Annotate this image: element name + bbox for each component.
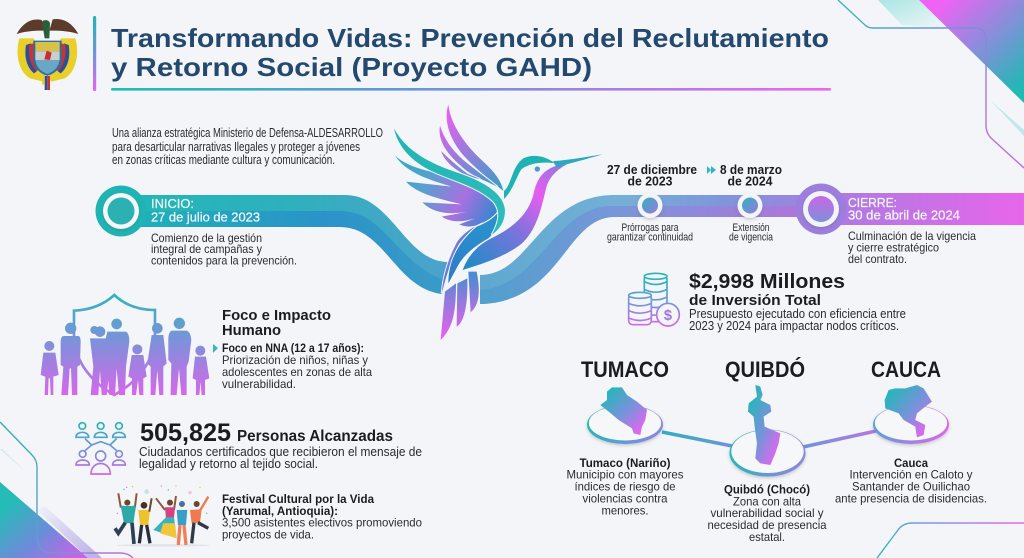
intro text: para desarticular narrativas Ilegales y proteger a jóvenes xyxy=(112,139,360,154)
intro text: en zonas críticas mediante cultura y comunicación. xyxy=(112,152,335,167)
decorative corner: bottom left xyxy=(0,422,133,558)
start date label: 27 de julio de 2023 xyxy=(151,210,260,224)
text: Quibdó: necesidad de presencia xyxy=(708,518,827,532)
milestone: 27 diciembre node xyxy=(638,193,662,218)
text: Cauca: ante presencia de disidencias. xyxy=(835,492,987,506)
decorative corner: top right xyxy=(838,0,1024,168)
festival text: Festival Cultural por la Vida xyxy=(222,492,374,506)
stat: investment: $2,998 Millones xyxy=(689,271,845,293)
text: Tumaco: menores. xyxy=(602,504,648,518)
icon: family under shield xyxy=(41,295,209,395)
stat: 505,825: Personas Alcanzadas xyxy=(237,428,393,445)
investment description: 2023 y 2024 para impactar nodos críticos. xyxy=(689,319,899,333)
map pin: Tumaco xyxy=(587,387,663,444)
closing description: y cierre estratégico xyxy=(848,240,939,254)
festival text: proyectos de vida. xyxy=(222,528,314,542)
foco text xyxy=(222,341,372,391)
milestone note: extensión: de vigencia xyxy=(729,232,774,244)
milestone date: 27 de diciembre xyxy=(607,162,697,188)
milestone date: 8 de marzo xyxy=(720,162,782,188)
milestone date: 27 de diciembre: 27 de diciembre xyxy=(607,162,697,177)
heading: foco e impacto xyxy=(222,307,331,339)
start description: integral de campañas y xyxy=(151,242,262,256)
festival text xyxy=(222,492,422,542)
hummingbird logo xyxy=(394,104,603,340)
start date label: INICIO: xyxy=(151,197,194,211)
closing date label: 30 de abril de 2024 xyxy=(848,208,960,222)
milestone date: 27 de diciembre: de 2023 xyxy=(628,174,672,188)
milestone date: 8 de marzo: 8 de marzo xyxy=(720,162,782,177)
stat description xyxy=(139,445,422,471)
title underline xyxy=(111,88,831,91)
heading: Quibdó: QUIBDÓ xyxy=(725,357,805,382)
text: Cauca: Intervención en Caloto y xyxy=(850,468,972,482)
text: Quibdó: vulnerabilidad social y xyxy=(710,506,824,520)
title xyxy=(111,23,829,82)
text: Tumaco: índices de riesgo de xyxy=(574,480,676,494)
text: Cauca xyxy=(835,456,987,506)
start date label xyxy=(151,197,260,224)
timeline ribbon: end xyxy=(480,193,1024,304)
stat: investment xyxy=(689,271,845,309)
text: Quibdó xyxy=(708,482,827,544)
stat description: legalidad y retorno al tejido social. xyxy=(139,457,318,471)
heading: Cauca: CAUCA xyxy=(871,357,941,382)
start description: contenidos para la prevención. xyxy=(151,254,297,268)
bullet marker xyxy=(213,344,218,353)
icon: people network xyxy=(76,423,125,474)
icon: Colombian coat of arms xyxy=(17,19,78,90)
icon: coins xyxy=(629,273,679,326)
foco text: adolescentes en zonas de alta xyxy=(222,365,372,379)
milestone note: prórrogas: Prórrogas para xyxy=(622,222,679,234)
heading: Tumaco: TUMACO xyxy=(581,357,669,382)
foco text: Foco en NNA (12 a 17 años): xyxy=(222,341,364,355)
closing description: Culminación de la vigencia xyxy=(848,229,976,243)
stat: 505,825: 505,825 xyxy=(140,419,231,447)
start description: Comienzo de la gestión xyxy=(151,231,262,245)
stat description: Ciudadanos certificados que recibieron el mensaje de xyxy=(139,445,422,459)
closing date label xyxy=(848,196,960,222)
text: Quibdó: Zona con alta xyxy=(733,494,801,508)
text: Tumaco: Municipio con mayores xyxy=(566,468,684,482)
text: Tumaco: violencias contra xyxy=(582,492,668,506)
title: y Retorno Social (Proyecto GAHD) xyxy=(111,52,592,82)
map pin: Quibdó xyxy=(730,385,806,476)
stat: investment: de Inversión Total xyxy=(689,292,821,309)
title: Transformando Vidas: Prevención del Reclutamiento xyxy=(111,23,829,53)
milestone date: 8 de marzo: de 2024 xyxy=(728,174,773,188)
milestone note: prórrogas: garantizar continuidad xyxy=(607,232,693,244)
milestone note: extensión xyxy=(729,222,774,244)
text: Quibdó: Quibdó (Chocó) xyxy=(724,482,810,496)
heading: foco e impacto: Humano xyxy=(222,322,281,339)
start description xyxy=(151,231,297,268)
milestone: 8 marzo node xyxy=(738,193,762,218)
text: Cauca: Cauca xyxy=(894,456,928,470)
title accent bar xyxy=(93,16,96,91)
decorative corner: bottom right xyxy=(877,523,1024,558)
text: Cauca: Santander de Ouilichao xyxy=(852,480,970,494)
illustration: people celebrating xyxy=(115,485,210,547)
milestone note: prórrogas xyxy=(607,222,693,244)
intro text xyxy=(112,125,383,167)
milestone: closing node xyxy=(796,184,846,234)
map pin: Cauca xyxy=(873,385,949,444)
festival text: 3,500 asistentes electivos promoviendo xyxy=(222,516,422,530)
investment description: Presupuesto ejecutado con eficiencia entre xyxy=(689,307,906,321)
closing description xyxy=(848,229,976,266)
heading: foco e impacto: Foco e Impacto xyxy=(222,307,331,324)
text: Tumaco xyxy=(566,456,684,518)
closing description: del contrato. xyxy=(848,252,907,266)
closing date label: CIERRE: xyxy=(848,196,897,210)
connector lines between regions xyxy=(662,431,876,447)
festival text: (Yarumal, Antioquia): xyxy=(222,504,338,518)
foco text: vulnerabilidad. xyxy=(222,377,296,391)
milestone note: extensión: Extensión xyxy=(732,222,770,234)
timeline ribbon: start xyxy=(96,186,448,294)
text: Quibdó: estatal. xyxy=(749,530,785,544)
intro text: Una alianza estratégica Ministerio de Defensa-ALDESARROLLO xyxy=(112,125,383,140)
stat: 505,825 xyxy=(140,419,393,447)
icon: double arrow xyxy=(707,166,716,174)
text: Tumaco: Tumaco (Nariño) xyxy=(580,456,670,470)
icon: coins: $ xyxy=(664,308,672,324)
investment description xyxy=(689,307,906,333)
foco text: Priorización de niños, niñas y xyxy=(222,353,368,367)
